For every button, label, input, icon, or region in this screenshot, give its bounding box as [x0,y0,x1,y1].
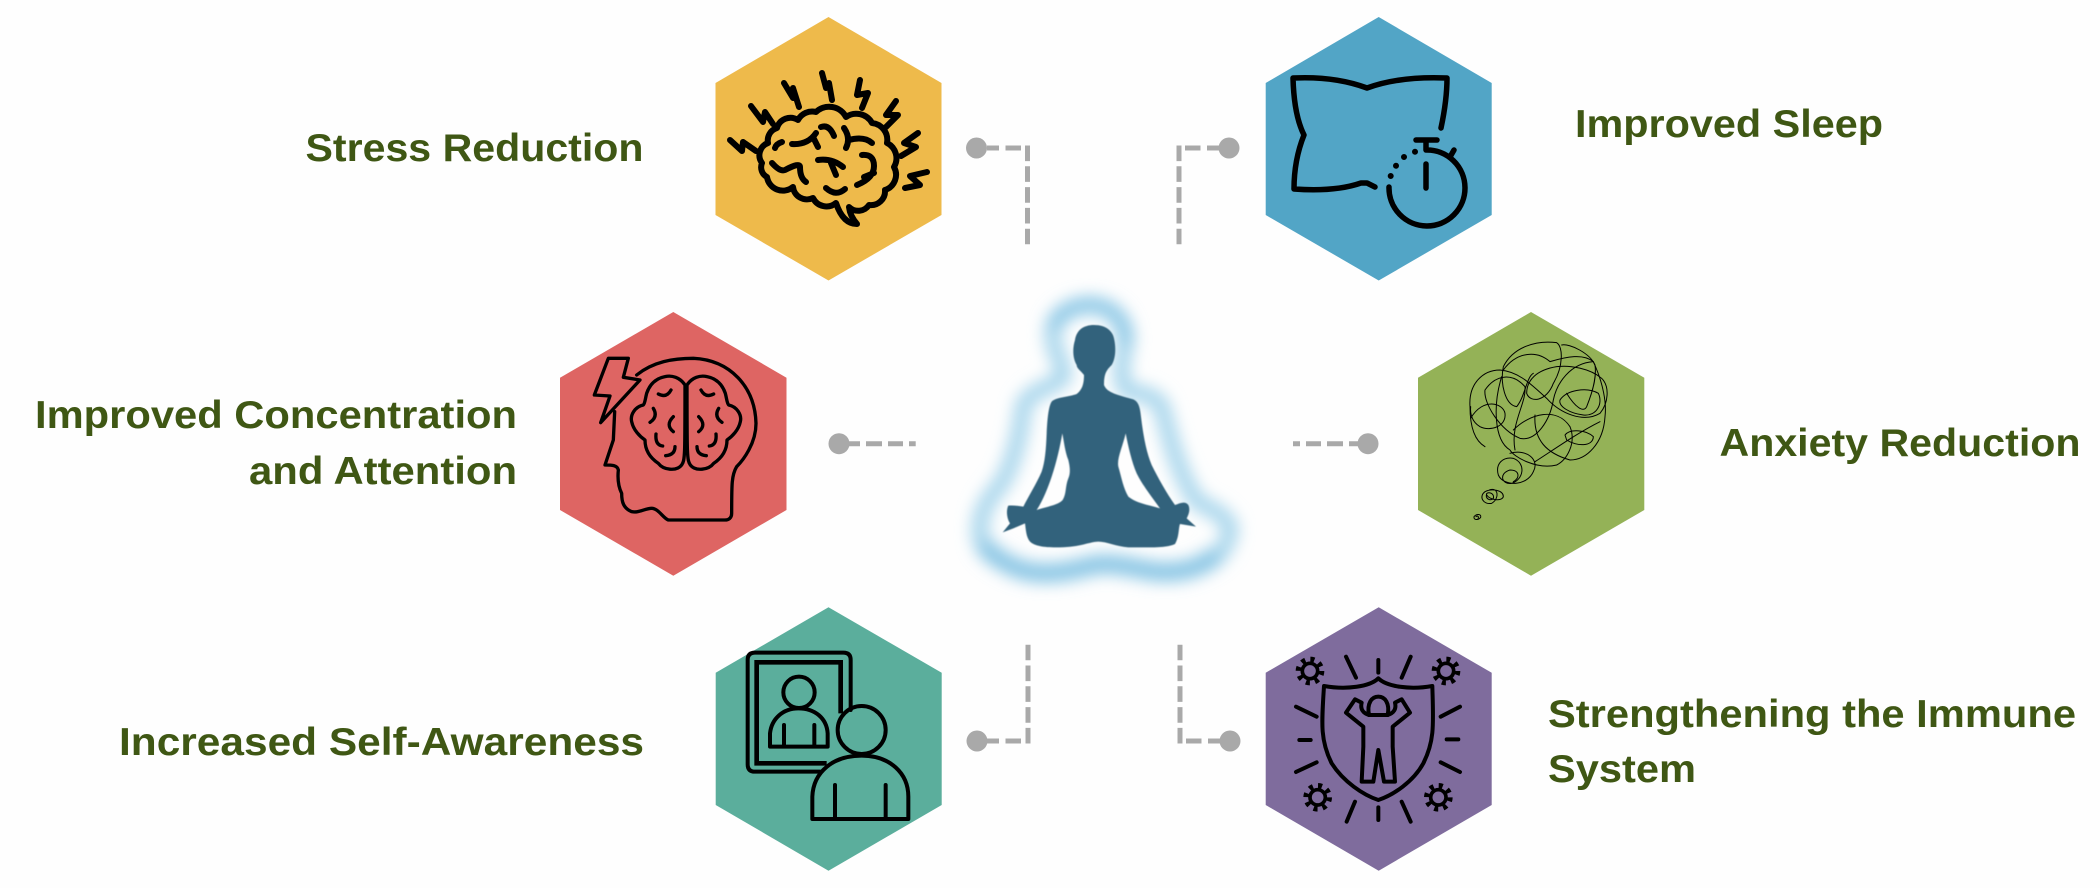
label line two: System [1548,748,1696,791]
panel: stress reduction [716,17,942,280]
icon: head with brain [594,358,756,520]
label: improved sleep: Improved Sleep [1575,103,1883,146]
silhouette [1003,325,1196,547]
hexagon: teal [716,607,942,871]
figure: meditating silhouette with blue aura [980,305,1230,573]
hexagon: green [1418,312,1644,576]
icon: person facing mirror [748,653,908,819]
panel: improved concentration [560,312,786,576]
icon: pillow and stopwatch [1293,78,1465,226]
label: improved concentration and attention: Improved Concentration [35,394,517,437]
icon: shield with strong figure [1296,657,1460,822]
label: anxiety reduction: Anxiety Reduction [1720,422,2080,465]
connector: bottom left [966,643,1028,752]
panel: immune system [1266,607,1492,871]
aura glow [980,305,1230,573]
icon: scribbled thought bubble [1470,342,1607,520]
hexagon: blue [1266,17,1492,280]
connector: bottom right [1180,643,1240,752]
label: strengthening the immune system: Strengthening the Immune [1548,693,2076,736]
connector: middle right [1293,433,1378,454]
hexagon: yellow [716,17,942,280]
icon: stressed brain [730,73,927,224]
panel: increased self-awareness [716,607,942,871]
connector: top right [1179,138,1240,246]
connector: top left [966,138,1028,246]
connector: middle left [828,433,916,454]
label line two: and Attention [249,450,517,493]
hexagon: purple [1266,607,1492,871]
label: stress reduction: Stress Reduction [306,127,644,170]
hexagon: red [560,312,786,576]
label: increased self-awareness: Increased Self-Awareness [119,721,644,764]
panel: anxiety reduction [1418,312,1644,576]
panel: improved sleep [1266,17,1492,280]
